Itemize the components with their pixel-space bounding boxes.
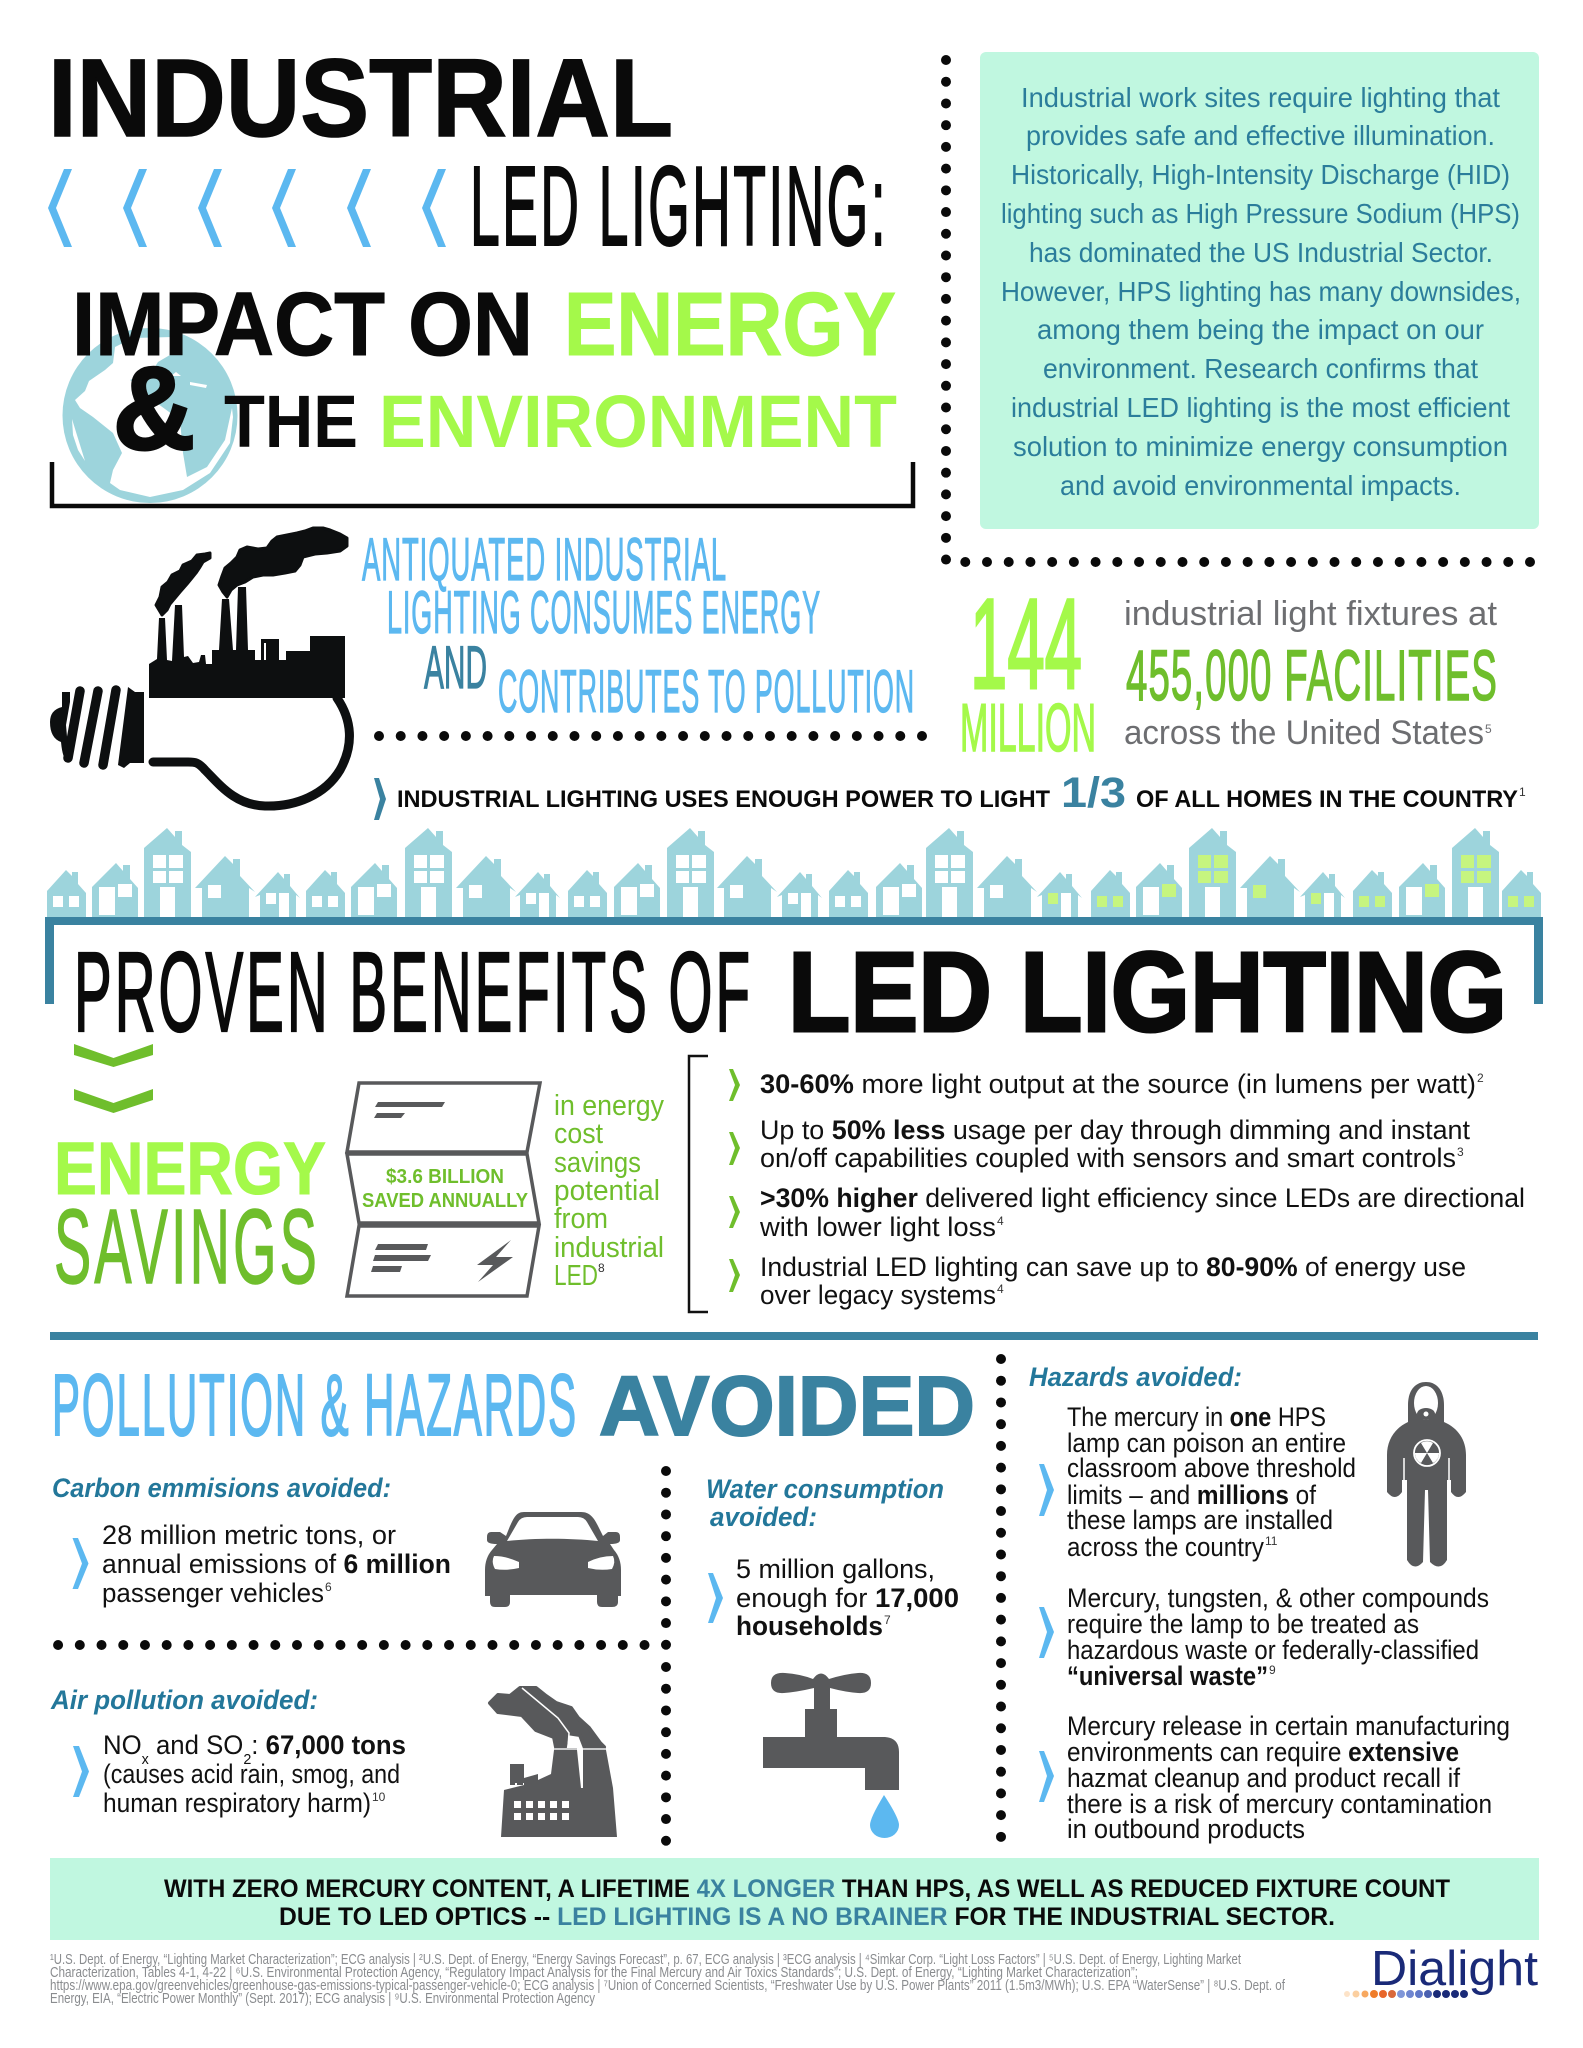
logo: Dialight: Dialight	[1371, 1942, 1538, 1996]
icon: factory	[490, 1688, 617, 1837]
list: LED benefits: with lower light loss	[759, 1212, 996, 1242]
callout: no brainer banner: DUE TO LED OPTICS -- LED LIGHTING IS A NO BRAINER FOR THE INDUSTRIAL SECTOR.	[279, 1903, 1335, 1931]
icon: teal chevron	[374, 778, 386, 820]
block: hazard three: there is a risk of mercury contamination	[1067, 1789, 1492, 1819]
title: Impact on: IMPACT ON	[72, 275, 533, 375]
list: LED benefits: on/off capabilities coupled with sensors and smart controls	[760, 1143, 1456, 1173]
block: hazard three: Mercury release in certain manufacturing	[1067, 1711, 1510, 1741]
block: hazard two: “universal waste”	[1067, 1661, 1268, 1691]
panel: introduction: industrial LED lighting is the most efficient	[1011, 392, 1510, 423]
list: LED benefits: Industrial LED lighting can save up to 80-90% of energy use	[760, 1252, 1466, 1282]
icon: globe	[62, 328, 238, 503]
footnotes: Characterization, Tables 4-1, 4-22 | ⁶U.S. Environmental Protection Agency, “Regulatory Impact Analysis for the Final Mercury and Air Toxics Standards”; U.S. Dept. of Energy, “Lighting Market Characterization”;	[50, 1965, 1138, 1981]
panel: introduction: and avoid environmental impacts.	[1060, 470, 1461, 501]
block: hazard three	[1039, 1711, 1510, 1844]
heading: proven benefits: PROVEN BENEFITS OF	[74, 929, 753, 1055]
stat: one third of homes: OF ALL HOMES IN THE COUNTRY	[1136, 786, 1518, 813]
title: Environment: ENVIRONMENT	[379, 380, 897, 463]
block: air pollution: 10	[372, 1790, 386, 1804]
block: hazard three: environments can require extensive	[1067, 1737, 1459, 1767]
block: hazard three: in outbound products	[1067, 1814, 1305, 1844]
heading: pollution and hazards avoided: POLLUTION & HAZARDS	[52, 1357, 578, 1454]
stat: one third of homes	[397, 769, 1526, 817]
list: LED benefits: Up to 50% less usage per day through dimming and instant	[760, 1115, 1470, 1145]
panel: introduction: lighting such as High Pressure Sodium (HPS)	[1001, 198, 1520, 229]
heading: hazards avoided: Hazards avoided:	[1029, 1362, 1242, 1392]
panel: introduction: environment. Research confirms that	[1043, 353, 1478, 384]
block: carbon emissions: Carbon emmisions avoided:	[52, 1473, 391, 1503]
heading: antiquated lighting: AND	[424, 634, 487, 701]
block: air pollution: x	[142, 1751, 149, 1768]
list: LED benefits: 2	[1477, 1071, 1484, 1085]
block: air pollution: NO	[103, 1730, 144, 1760]
block: air pollution: human respiratory harm)	[103, 1788, 371, 1818]
text: energy cost savings: in energy	[554, 1090, 664, 1122]
panel: introduction: has dominated the US Industrial Sector.	[1029, 237, 1493, 268]
heading: energy savings	[54, 1127, 326, 1306]
block: water consumption: enough for 17,000	[736, 1583, 959, 1613]
icon: car	[485, 1512, 621, 1607]
panel: introduction: However, HPS lighting has many downsides,	[1001, 276, 1521, 307]
text: energy cost savings: savings	[554, 1147, 641, 1179]
text: energy cost savings: potential	[554, 1175, 660, 1207]
stat: 455,000 facilities: 5	[1485, 722, 1492, 736]
block: hazard one: 11	[1265, 1534, 1278, 1548]
stat: 455,000 facilities	[1124, 595, 1498, 752]
icon: green chevrons down	[74, 1044, 153, 1113]
panel: introduction: provides safe and effective illumination.	[1026, 120, 1495, 151]
text: energy cost savings: from	[554, 1203, 608, 1235]
title bracket	[52, 462, 913, 506]
block: hazard one: classroom above threshold	[1067, 1453, 1356, 1483]
icon: brochure with $3.6 billion	[347, 1083, 540, 1296]
block: carbon emissions: 6	[325, 1580, 332, 1594]
block: hazard one: lamp can poison an entire	[1067, 1428, 1346, 1458]
panel: introduction	[980, 52, 1539, 529]
heading: energy savings: ENERGY	[54, 1127, 326, 1210]
stat: one third of homes: 1/3	[1061, 769, 1126, 817]
stat: one third of homes: 1	[1519, 785, 1526, 799]
icon: faucet with drop	[763, 1673, 899, 1838]
list: LED benefits: 3	[1457, 1145, 1464, 1159]
title: The: THE	[224, 380, 358, 463]
footnotes: ¹U.S. Dept. of Energy, “Lighting Market Characterization”; ECG analysis | ²U.S. Dept. of Energy, “Energy Savings Forecast”, p. 67, ECG analysis | ³ECG analysis | ⁴Simkar Corp. “Light Loss Factors” | ⁵U.S. Dept. of Energy, Lighting Market	[50, 1952, 1241, 1968]
row of houses	[47, 828, 1541, 917]
block: hazard three: hazmat cleanup and product recall if	[1067, 1763, 1460, 1793]
title: Industrial: INDUSTRIAL	[48, 37, 673, 160]
list: LED benefits	[729, 1069, 1525, 1310]
block: hazard two: require the lamp to be treated as	[1067, 1609, 1419, 1639]
block: hazard one: The mercury in one HPS	[1067, 1402, 1326, 1432]
icon: six blue chevrons	[48, 169, 446, 247]
panel: introduction: solution to minimize energy consumption	[1013, 431, 1508, 462]
stat: 455,000 facilities: across the United States	[1124, 714, 1484, 752]
block: air pollution: 67,000 tons	[266, 1730, 406, 1760]
panel: introduction: Industrial work sites require lighting that	[1021, 82, 1500, 113]
block: water consumption: 5 million gallons,	[736, 1554, 935, 1584]
text: LED LIGHTING:	[470, 143, 888, 269]
callout: no brainer banner: WITH ZERO MERCURY CONTENT, A LIFETIME 4X LONGER THAN HPS, AS WELL AS REDUCED FIXTURE COUNT	[164, 1875, 1450, 1903]
block: air pollution: 2	[243, 1751, 251, 1768]
list: LED benefits: >30% higher delivered light efficiency since LEDs are directional	[760, 1183, 1525, 1213]
block: carbon emissions: 28 million metric tons, or	[102, 1520, 396, 1550]
block: hazard two: hazardous waste or federally-classified	[1067, 1635, 1479, 1665]
block: hazard one	[1039, 1402, 1356, 1562]
stat: one third of homes: INDUSTRIAL LIGHTING USES ENOUGH POWER TO LIGHT	[397, 786, 1050, 813]
block: air pollution: (causes acid rain, smog, and	[103, 1759, 400, 1789]
text: energy cost savings: industrial	[554, 1232, 664, 1264]
text: energy cost savings: cost	[554, 1118, 603, 1150]
heading: antiquated lighting	[362, 526, 915, 725]
block: air pollution: Air pollution avoided:	[50, 1685, 318, 1715]
stat: 144 million: 144	[970, 573, 1082, 716]
panel: introduction: Historically, High-Intensity Discharge (HID)	[1011, 159, 1510, 190]
block: hazard one: limits – and millions of	[1067, 1480, 1316, 1510]
stat: 144 million	[960, 573, 1096, 766]
block: carbon emissions	[52, 1473, 451, 1608]
icon: light bulb factory	[50, 528, 349, 806]
block: hazard one: these lamps are installed	[1067, 1505, 1333, 1535]
text: energy cost savings: LED	[554, 1260, 598, 1292]
bracket: benefits list	[689, 1056, 708, 1312]
icon: brochure with $3.6 billion: SAVED ANNUALLY	[362, 1190, 529, 1212]
block: air pollution	[50, 1685, 406, 1818]
list: LED benefits: 4	[997, 1214, 1004, 1228]
panel frame: proven benefits	[45, 917, 1543, 1004]
block: water consumption: 7	[884, 1613, 891, 1627]
text: MILLION	[960, 690, 1096, 766]
heading: energy savings: SAVINGS	[54, 1188, 320, 1306]
block: hazard two: Mercury, tungsten, & other compounds	[1067, 1583, 1489, 1613]
text: CONTRIBUTES TO POLLUTION	[498, 658, 915, 725]
footnotes: Energy, EIA, “Electric Power Monthly” (Sept. 2017); ECG analysis | ⁹U.S. Environmental Protection Agency	[50, 1991, 596, 2007]
block: water consumption	[706, 1474, 959, 1641]
heading: proven benefits: LED LIGHTING	[788, 929, 1507, 1055]
stat: 455,000 facilities: industrial light fixtures at	[1124, 595, 1498, 633]
icon: brochure with $3.6 billion: $3.6 BILLION	[386, 1166, 504, 1188]
icon: hazmat suit	[1387, 1382, 1466, 1567]
block: air pollution: :	[251, 1730, 266, 1760]
footnotes: https://www.epa.gov/greenvehicles/greenhouse-gas-emissions-typical-passenger-vehicle-0; ECG analysis | ⁷Union of Concerned Scientists, “Freshwater Use by U.S. Power Plants” 2011 (1.5m3/MWh); U.S. EPA “WaterSense” | ⁸U.S. Dept. of	[50, 1978, 1286, 1994]
text: energy cost savings: 8	[598, 1261, 605, 1275]
heading: antiquated lighting: ANTIQUATED INDUSTRIAL	[362, 526, 727, 593]
block: hazard two	[1039, 1583, 1489, 1691]
block: water consumption: Water consumption	[706, 1474, 944, 1504]
text: energy cost savings	[554, 1090, 664, 1292]
footnotes	[50, 1952, 1286, 2007]
block: water consumption: households	[736, 1611, 883, 1641]
list: LED benefits: 4	[997, 1282, 1004, 1296]
block: water consumption: avoided:	[710, 1502, 817, 1532]
heading: pollution and hazards avoided: AVOIDED	[599, 1359, 975, 1453]
list: LED benefits: 30-60% more light output at the source (in lumens per watt)	[760, 1069, 1476, 1099]
block: carbon emissions: passenger vehicles	[102, 1578, 324, 1608]
title: ampersand: &	[113, 343, 195, 475]
heading: antiquated lighting: LIGHTING CONSUMES ENERGY	[387, 579, 821, 646]
block: hazard one: across the country	[1067, 1532, 1264, 1562]
block: hazard two: 9	[1269, 1663, 1276, 1677]
block: air pollution: and SO	[149, 1730, 243, 1760]
list: LED benefits: over legacy systems	[760, 1280, 996, 1310]
title: Energy: ENERGY	[564, 275, 896, 375]
block: carbon emissions: annual emissions of 6 million	[102, 1549, 451, 1579]
callout: no brainer banner	[50, 1858, 1539, 1940]
panel: introduction: among them being the impact on our	[1037, 314, 1484, 345]
